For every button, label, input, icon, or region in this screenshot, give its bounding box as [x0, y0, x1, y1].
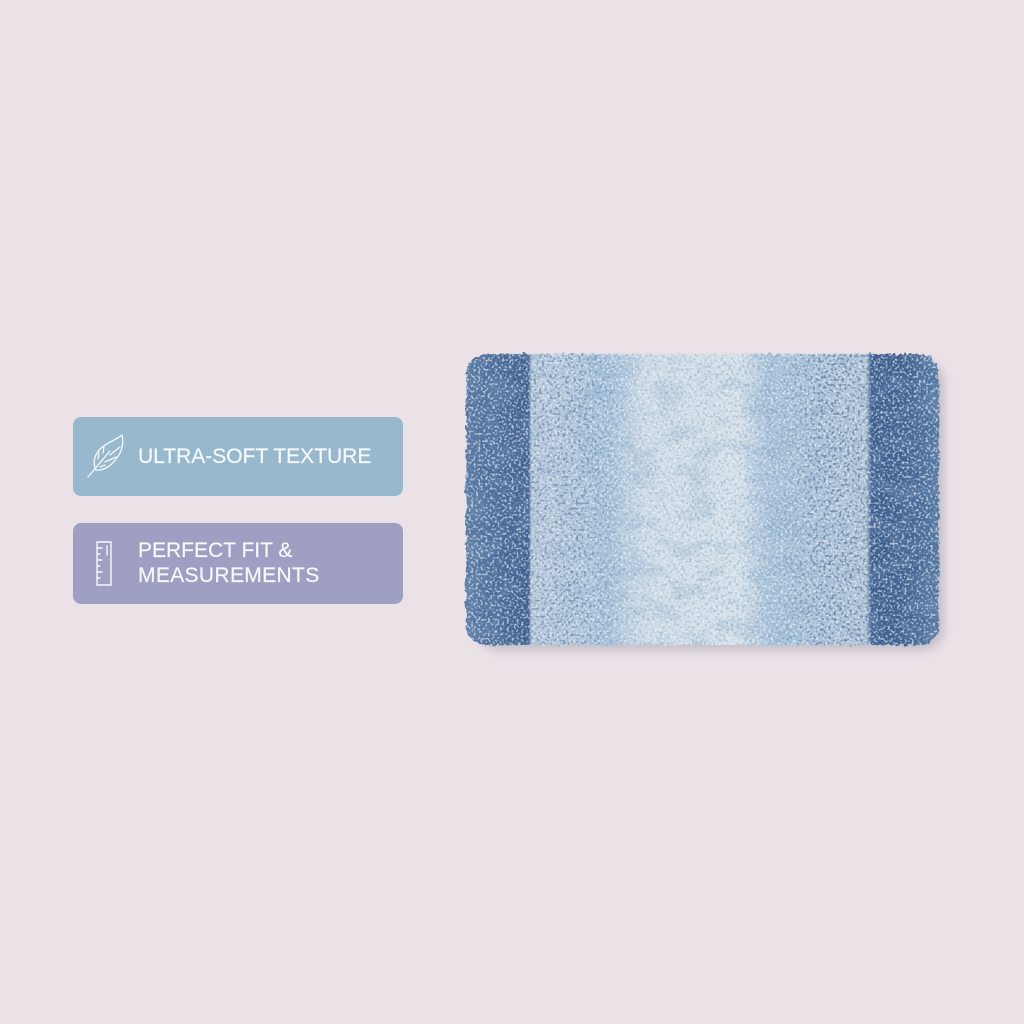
text: ultra-soft texture: ULTRA-SOFT TEXTURE — [138, 445, 371, 468]
icon: ruler — [96, 541, 112, 586]
panel: ultra-soft texture badge — [73, 417, 403, 496]
rug shadow — [476, 361, 944, 650]
illustration: blue gradient bath mat — [464, 352, 948, 654]
text: perfect fit and measurements: PERFECT FIT & — [138, 539, 292, 562]
text: perfect fit and measurements — [138, 539, 320, 587]
rug body — [460, 348, 945, 651]
icon: feather — [87, 434, 124, 478]
text: perfect fit and measurements: MEASUREMENTS — [138, 564, 320, 587]
panel: perfect fit and measurements badge — [73, 523, 403, 604]
